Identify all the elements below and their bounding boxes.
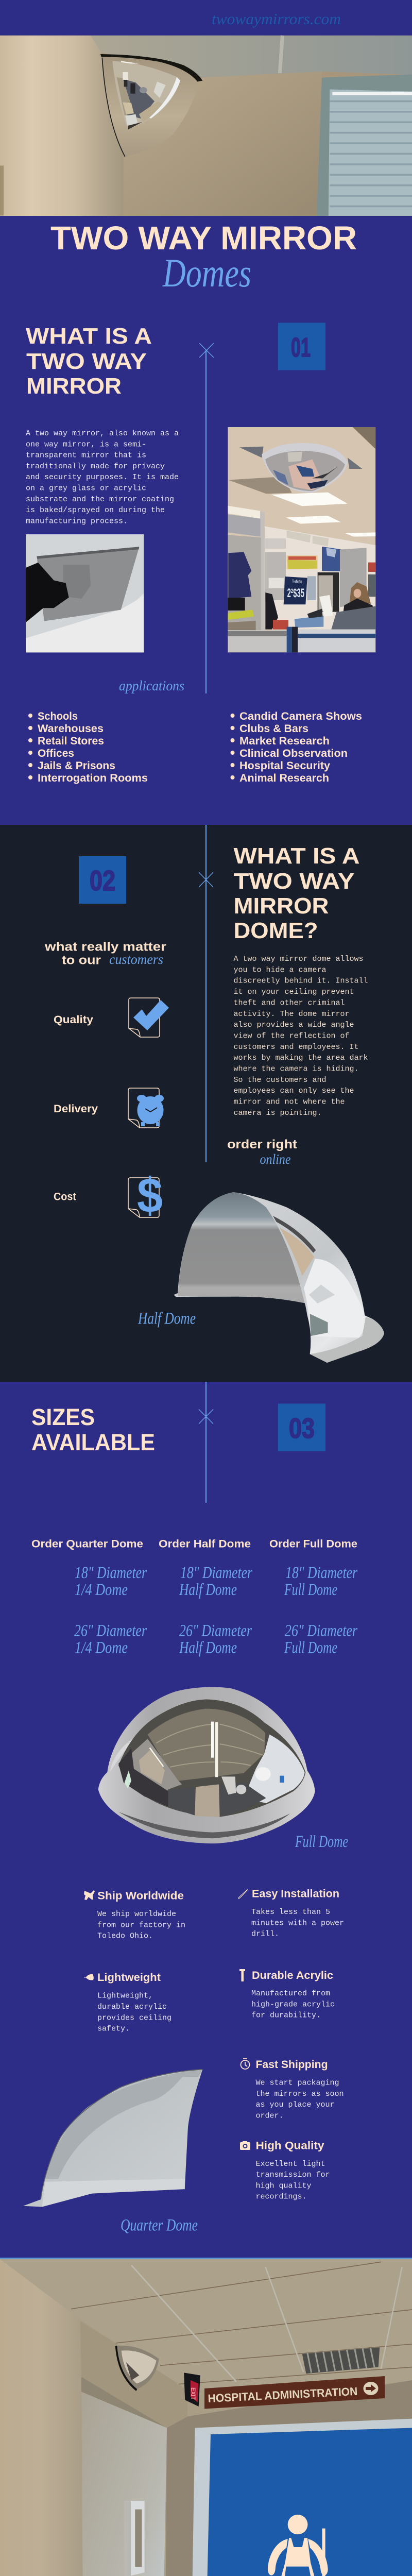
feature: ship worldwide: Ship Worldwide (97, 1890, 184, 1902)
feature: easy installation: Easy Installation (252, 1888, 339, 1900)
panel: top banner (0, 0, 412, 36)
list: applications left column: Interrogation Rooms (38, 772, 148, 784)
timeline star and line (199, 825, 213, 1162)
description text: camera is pointing. (234, 1109, 322, 1117)
description text: also provides a wide angle (234, 1021, 354, 1029)
feature: high quality: recordings. (255, 2193, 307, 2201)
what really matters heading (44, 940, 166, 968)
description text: activity. The dome mirror (234, 1010, 350, 1019)
list: applications right column: Clinical Observation (239, 748, 348, 759)
size options: full dome: Full Dome (284, 1638, 337, 1657)
description text: employees can only see the (234, 1087, 354, 1095)
order column headings: Order Quarter Dome (31, 1538, 143, 1550)
description text: mirror and not where the (234, 1098, 345, 1107)
photo: quarter dome mirror (23, 2070, 202, 2207)
description text: customers and employees. It (234, 1043, 359, 1052)
size options: quarter dome: 26" Diameter (74, 1622, 147, 1640)
list: applications right column: Candid Camera Shows (239, 710, 362, 722)
size options: half dome: 18" Diameter (180, 1564, 252, 1582)
order column headings (31, 1538, 357, 1550)
half dome label: Half Dome (138, 1310, 196, 1328)
icon: stopwatch (241, 2059, 249, 2069)
feature: ship worldwide: Toledo Ohio. (97, 1932, 153, 1941)
sign: hospital administration (204, 2376, 385, 2409)
feature: high quality (240, 2140, 330, 2201)
feature: fast shipping: as you place your (255, 2100, 335, 2109)
description text (234, 955, 368, 1117)
row: cost: Cost (54, 1191, 76, 1202)
number badge 01 (278, 323, 325, 370)
feature: fast shipping: Fast Shipping (255, 2059, 328, 2071)
size options: half dome: Half Dome (179, 1581, 237, 1599)
section heading: WHAT IS A (26, 324, 152, 349)
main title: TWO WAY MIRROR (50, 219, 357, 257)
photo: quarter dome mirror in corner of room (0, 36, 412, 216)
icon: airplane (84, 1890, 95, 1900)
timeline star and line (199, 1382, 213, 1503)
row: delivery: Delivery (54, 1103, 98, 1115)
feature: ship worldwide: We ship worldwide (97, 1910, 176, 1919)
feature: lightweight: durable acrylic (97, 2003, 167, 2011)
full dome label: Full Dome (295, 1833, 348, 1851)
size options: half dome: Half Dome (179, 1638, 237, 1657)
feature: durable acrylic: Manufactured from (251, 1989, 330, 1998)
section heading: AVAILABLE (31, 1429, 155, 1455)
list: applications left column: Jails & Prisons (38, 760, 115, 772)
applications label: applications (119, 678, 184, 693)
feature: fast shipping: We start packaging (255, 2078, 339, 2088)
order right online: order right (227, 1138, 297, 1151)
number badge 03 (278, 1403, 325, 1451)
list: applications right column: Market Research (239, 735, 330, 747)
site name: twowaymirrors.com (212, 10, 341, 28)
quarter dome label: Quarter Dome (121, 2216, 198, 2235)
description text: view of the reflection of (234, 1031, 350, 1040)
size options: full dome: 26" Diameter (285, 1622, 357, 1640)
section heading: DOME? (234, 918, 318, 943)
section heading: TWO WAY (26, 349, 147, 374)
list: applications right column: Clubs & Bars (239, 723, 308, 735)
feature: easy installation: minutes with a power (251, 1919, 344, 1927)
row: cost: $ (137, 1168, 163, 1223)
row: quality (54, 998, 169, 1037)
feature: fast shipping: the mirrors as soon (255, 2090, 344, 2098)
feature: high quality: high quality (255, 2181, 312, 2190)
feature: easy installation: Takes less than 5 (251, 1908, 330, 1917)
description text (26, 429, 179, 526)
feature: easy installation (238, 1888, 344, 1939)
order column headings: Order Full Dome (269, 1538, 357, 1550)
description text: and security purposes. It is made (26, 473, 179, 482)
description text: theft and other criminal (234, 998, 345, 1007)
description text: transparent mirror that is (26, 451, 146, 460)
description text: manufacturing process. (26, 517, 128, 526)
order right online (227, 1138, 297, 1167)
feature: lightweight: Lightweight (97, 1972, 161, 1984)
feature: durable acrylic: for durability. (251, 2011, 321, 2020)
section heading (234, 843, 359, 943)
photo: half dome mirror (174, 1192, 384, 1363)
description text: A two way mirror dome allows (234, 955, 364, 963)
feature: durable acrylic (239, 1969, 335, 2020)
icon: hammer (239, 1969, 245, 1981)
section heading: MIRROR (234, 893, 329, 919)
size options: quarter dome: 1/4 Dome (75, 1638, 128, 1657)
description text: is baked/sprayed on during the (26, 506, 165, 515)
list: applications left column: Warehouses (38, 723, 104, 735)
feature: ship worldwide (84, 1890, 185, 1941)
description text: on a grey glass or acrylic (26, 484, 146, 493)
description text: works by making the area dark (234, 1054, 368, 1062)
photo: ceiling dome mirror in a retail store: 2²$35 (287, 586, 304, 600)
description text: discreetly behind it. Install (234, 977, 368, 986)
panel: recommended cleaning tools (0, 2428, 412, 2576)
size options: half dome: 26" Diameter (179, 1622, 252, 1640)
order right online: online (260, 1151, 291, 1167)
number badge 01: 01 (291, 333, 311, 363)
icon: feather (84, 1974, 94, 1980)
exit sign text: EXIT (190, 2387, 197, 2400)
description text: substrate and the mirror coating (26, 495, 174, 504)
what really matters heading: what really matter (44, 940, 166, 954)
feature: high quality: Excellent light (255, 2160, 325, 2168)
feature: lightweight: provides ceiling (97, 2013, 171, 2022)
list: applications left column: Offices (38, 748, 74, 759)
row: quality: Quality (54, 1014, 93, 1026)
size options: quarter dome: 1/4 Dome (75, 1581, 128, 1599)
description text: you to hide a camera (234, 965, 327, 974)
description text: one way mirror, is a semi- (26, 440, 146, 449)
section heading: WHAT IS A (234, 843, 359, 869)
what really matters heading: customers (109, 952, 163, 967)
what really matters heading: to our (62, 953, 101, 968)
list: applications right column (231, 710, 362, 784)
panel: what is a two way mirror dome (0, 825, 412, 1382)
feature: high quality: High Quality (255, 2140, 324, 2151)
icon: camera (240, 2141, 250, 2150)
size options: full dome: 18" Diameter (285, 1564, 357, 1582)
feature: easy installation: drill. (251, 1930, 279, 1939)
list: applications left column: Schools (38, 710, 78, 722)
section heading (31, 1404, 155, 1455)
description text: A two way mirror, also known as a (26, 429, 179, 438)
list: applications left column: Retail Stores (38, 735, 104, 747)
photo: ceiling dome mirror in a retail store: T-shirts (292, 579, 302, 584)
icon: drill bit (238, 1890, 248, 1899)
section heading: SIZES (31, 1404, 95, 1430)
icon: cleaner with broom (268, 2515, 336, 2576)
list: applications right column: Animal Research (239, 772, 329, 784)
dome mirror in store photo (239, 443, 362, 493)
photo: grey acrylic sheet held in gloved hand (26, 534, 144, 652)
feature: durable acrylic: high-grade acrylic (251, 2000, 335, 2009)
description text: So the customers and (234, 1076, 327, 1084)
size options: quarter dome (74, 1564, 147, 1657)
feature: high quality: transmission for (255, 2171, 330, 2179)
section heading (26, 324, 152, 399)
size options: full dome: Full Dome (284, 1581, 337, 1599)
subtitle Domes: Domes (162, 250, 251, 295)
row: delivery (54, 1088, 164, 1128)
list: applications left column (28, 710, 148, 784)
photo: hospital corridor with dome mirror (0, 2259, 412, 2576)
order column headings: Order Half Dome (159, 1538, 251, 1550)
timeline star and line (199, 343, 214, 693)
feature: lightweight: safety. (97, 2025, 130, 2033)
feature: lightweight: Lightweight, (97, 1992, 153, 2001)
feature: fast shipping: order. (255, 2111, 284, 2120)
description text: it on your ceiling prevent (234, 988, 354, 996)
feature: lightweight (84, 1972, 171, 2033)
feature: ship worldwide: from our factory in (97, 1921, 185, 1929)
size options: quarter dome: 18" Diameter (75, 1564, 147, 1582)
panel: sizes available (0, 1382, 412, 2260)
panel: what is a two way mirror (0, 216, 412, 825)
number badge 02 (79, 856, 126, 904)
photo: ceiling dome mirror in a retail store (228, 427, 375, 653)
feature: fast shipping (241, 2059, 344, 2120)
row: cost (54, 1168, 163, 1223)
section heading: TWO WAY (234, 869, 354, 894)
section heading: MIRROR (26, 374, 122, 399)
photo: full dome mirror (98, 1687, 315, 1843)
list: applications right column: Hospital Security (239, 760, 330, 772)
description text: traditionally made for privacy (26, 462, 165, 471)
sign: hospital administration: HOSPITAL ADMINISTRATION (208, 2385, 358, 2405)
size options: full dome (284, 1564, 357, 1657)
size options: half dome (179, 1564, 252, 1657)
feature: durable acrylic: Durable Acrylic (252, 1970, 333, 1981)
number badge 02: 02 (90, 865, 115, 896)
number badge 03: 03 (289, 1412, 315, 1444)
description text: where the camera is hiding. (234, 1064, 359, 1074)
